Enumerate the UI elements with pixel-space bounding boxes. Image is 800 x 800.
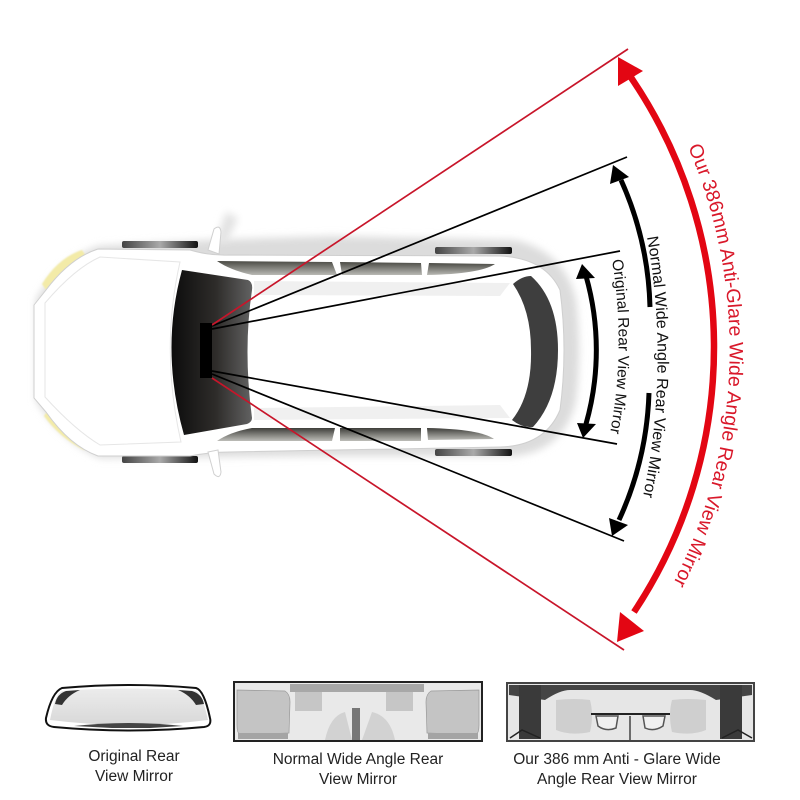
- car shadow: [36, 236, 579, 458]
- caption: original mirror: View Mirror: [95, 768, 173, 785]
- mirror shadow top: [216, 212, 238, 244]
- normal wide angle arrow: [609, 165, 650, 536]
- caption: anti-glare mirror: Our 386 mm Anti - Glare Wide: [513, 751, 721, 768]
- thumbnail: anti-glare mirror: [507, 683, 754, 741]
- caption: original mirror: Original Rear: [88, 748, 180, 765]
- caption: anti-glare mirror: Angle Rear View Mirror: [537, 771, 697, 788]
- red double arrow: [617, 57, 714, 642]
- door mirrors: [208, 227, 221, 477]
- car top view: [34, 212, 579, 477]
- curved label: anti-glare: Our 386mm Anti-Glare Wide Angle Rear View Mirror: [674, 144, 744, 588]
- windshield: [171, 270, 252, 435]
- caption: normal wide angle: Normal Wide Angle Rear: [273, 751, 443, 768]
- original mirror arrow: [576, 264, 596, 438]
- original mirror sight lines: [212, 251, 620, 444]
- wheels: [122, 241, 512, 463]
- curved label: original: Original Rear View Mirror: [610, 260, 630, 434]
- car body: [34, 249, 564, 456]
- thumbnail: normal wide angle: [234, 682, 482, 741]
- headlights: [42, 250, 90, 450]
- side windows bottom: [217, 428, 494, 441]
- curved label: normal wide angle: Normal Wide Angle Rear View Mirror: [644, 236, 670, 498]
- rear window: [512, 276, 558, 427]
- side windows top: [217, 261, 495, 275]
- caption: normal wide angle: View Mirror: [319, 771, 397, 788]
- rear view mirror marker: [200, 323, 212, 378]
- anti-glare sight lines: [212, 49, 628, 650]
- thumbnail: original mirror: [46, 685, 210, 730]
- hood outline: [45, 257, 181, 445]
- normal wide angle sight lines: [212, 157, 627, 541]
- roof rails: [254, 281, 510, 420]
